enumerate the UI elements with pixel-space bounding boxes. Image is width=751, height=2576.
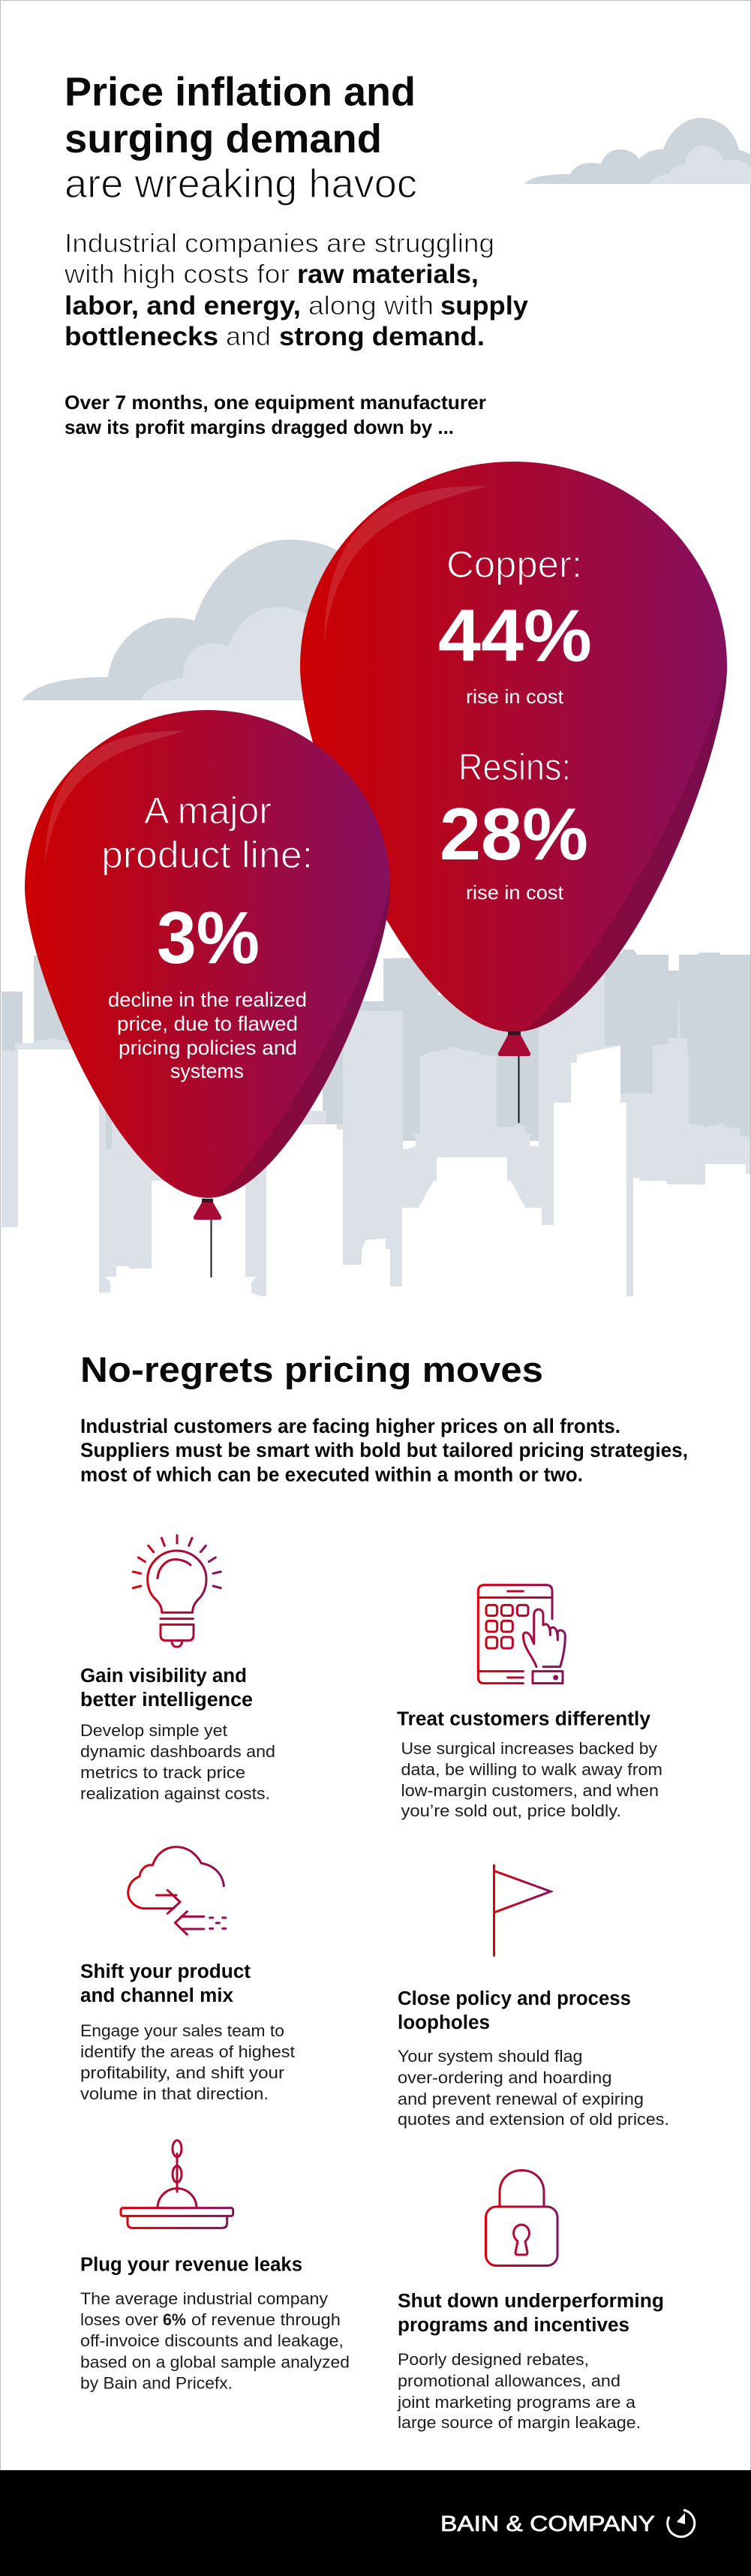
label: a major product line: A major xyxy=(144,790,272,832)
subheading: and channel mix xyxy=(80,1985,233,2006)
text block: intro: Industrial companies are struggling xyxy=(65,229,494,258)
body text: quotes and extension of old prices. xyxy=(398,2110,669,2129)
body text: dynamic dashboards and xyxy=(80,1742,275,1761)
text block: intro: labor, and energy, xyxy=(65,291,301,320)
panel: shift product and channel mix xyxy=(80,1847,295,2103)
subheading: Treat customers differently xyxy=(397,1708,651,1729)
text block: intro: along with xyxy=(308,291,434,320)
subheading: Gain visibility and xyxy=(80,1666,247,1687)
title: are wreaking havoc xyxy=(65,161,417,206)
text block: intro: with high costs for xyxy=(64,260,290,289)
body text: Use surgical increases backed by xyxy=(401,1739,657,1758)
illustration: city skyline xyxy=(2,949,750,1321)
footer brand name: BAIN & COMPANY xyxy=(440,2512,655,2536)
subheading: better intelligence xyxy=(80,1690,253,1711)
text block: section intro xyxy=(80,1415,688,1486)
large balloon: copper and resins xyxy=(300,462,727,1123)
caption: decline: pricing policies and xyxy=(119,1037,297,1059)
balloon body xyxy=(25,710,390,1198)
caption: decline: systems xyxy=(170,1060,244,1082)
panel: plug revenue leaks xyxy=(80,2141,350,2393)
body text: metrics to track price xyxy=(80,1763,245,1782)
text block: lead-in xyxy=(65,391,486,438)
icon: cloud with arrows xyxy=(128,1847,226,1934)
balloon knot xyxy=(498,1035,530,1056)
body text: The average industrial company xyxy=(80,2289,328,2308)
text block: lead-in: Over 7 months, one equipment manufacturer xyxy=(65,391,486,414)
icon: light bulb xyxy=(133,1536,221,1647)
label: resins: Resins: xyxy=(458,746,571,788)
body text: volume in that direction. xyxy=(80,2084,269,2103)
body text xyxy=(80,2021,295,2103)
panel: close policy loopholes xyxy=(398,1864,669,2129)
icon: drain plug with chain xyxy=(121,2141,233,2228)
panel: shut down underperforming programs xyxy=(397,2171,664,2432)
body text xyxy=(80,2289,350,2393)
caption: copper rise: rise in cost xyxy=(466,685,564,708)
caption: decline xyxy=(108,989,307,1082)
body text: and prevent renewal of expiring xyxy=(398,2090,644,2108)
caption: decline: price, due to flawed xyxy=(117,1013,298,1035)
panel: treat customers differently xyxy=(397,1585,662,1820)
text block: intro: strong demand. xyxy=(279,322,485,351)
subheading: programs and incentives xyxy=(398,2315,629,2336)
subheading: Close policy and process xyxy=(398,1988,631,2009)
text block: intro: bottlenecks xyxy=(65,322,218,351)
subheading: Shut down underperforming xyxy=(398,2291,664,2312)
text block: section intro: Suppliers must be smart with bold but tailored pricing strategies, xyxy=(80,1439,688,1461)
subheading xyxy=(80,1666,253,1711)
title: Price inflation and xyxy=(65,69,416,114)
balloon body xyxy=(300,462,727,1032)
body text xyxy=(401,1739,662,1820)
stat: 3%: 3% xyxy=(157,896,260,979)
body text: you’re sold out, price boldly. xyxy=(401,1801,621,1820)
heading: no-regrets pricing moves: No-regrets pricing moves xyxy=(80,1350,543,1389)
label: copper: Copper: xyxy=(446,543,582,585)
icon: padlock xyxy=(486,2171,557,2265)
text block: intro: and xyxy=(226,322,271,351)
body text: Develop simple yet xyxy=(80,1721,227,1740)
title xyxy=(65,69,417,206)
subheading xyxy=(80,1961,251,2006)
balloon knot xyxy=(194,1202,221,1220)
text block: intro xyxy=(64,229,529,351)
subheading: Shift your product xyxy=(80,1961,251,1982)
icon: cloud top right xyxy=(524,118,751,184)
caption: resins rise: rise in cost xyxy=(466,881,564,904)
body text: identify the areas of highest xyxy=(80,2042,295,2061)
icon: brand logo xyxy=(668,2510,695,2537)
text block: section intro: Industrial customers are facing higher prices on all fronts. xyxy=(80,1415,620,1437)
body text: Your system should flag xyxy=(398,2047,582,2066)
text block: intro: supply xyxy=(440,291,529,320)
body text: off-invoice discounts and leakage, xyxy=(80,2331,344,2350)
body text: 6% xyxy=(163,2310,186,2329)
subheading: loopholes xyxy=(398,2012,490,2033)
small balloon: product line xyxy=(25,710,390,1277)
body text: promotional allowances, and xyxy=(398,2372,620,2390)
body text xyxy=(80,1721,275,1803)
stat: 28%: 28% xyxy=(440,793,588,875)
body text: of revenue through xyxy=(191,2310,341,2329)
icon: flag xyxy=(494,1864,551,1956)
subheading xyxy=(398,2291,664,2336)
balloon string xyxy=(210,1201,212,1277)
body text xyxy=(398,2047,669,2129)
text block: section intro: most of which can be executed within a month or two. xyxy=(80,1464,583,1486)
title: surging demand xyxy=(65,116,382,161)
panel: gain visibility xyxy=(80,1536,275,1803)
body text: Poorly designed rebates, xyxy=(398,2350,589,2369)
illustration: large cloud xyxy=(22,540,353,700)
label: a major product line: product line: xyxy=(101,834,313,876)
footer band xyxy=(0,2470,751,2576)
subheading xyxy=(398,1988,631,2033)
text block: intro: raw materials, xyxy=(297,260,479,289)
body text: realization against costs. xyxy=(80,1784,270,1803)
body text: Engage your sales team to xyxy=(80,2021,284,2040)
body text: by Bain and Pricefx. xyxy=(80,2373,233,2393)
body text: joint marketing programs are a xyxy=(397,2393,636,2412)
body text: large source of margin leakage. xyxy=(398,2413,641,2432)
body text: data, be willing to walk away from xyxy=(401,1760,662,1779)
body text xyxy=(397,2350,641,2432)
body text: profitability, and shift your xyxy=(80,2063,284,2082)
body text: based on a global sample analyzed xyxy=(80,2352,350,2372)
label: a major product line xyxy=(101,790,313,876)
stat: 44%: 44% xyxy=(438,594,592,677)
body text: low-margin customers, and when xyxy=(401,1781,659,1800)
caption: decline: decline in the realized xyxy=(108,989,307,1011)
icon: tablet with hand xyxy=(478,1585,565,1684)
body text: loses over xyxy=(80,2310,158,2329)
subheading: Plug your revenue leaks xyxy=(80,2255,302,2276)
balloon string xyxy=(518,1035,519,1123)
text block: lead-in: saw its profit margins dragged down by ... xyxy=(65,416,454,438)
body text: over-ordering and hoarding xyxy=(398,2069,612,2087)
